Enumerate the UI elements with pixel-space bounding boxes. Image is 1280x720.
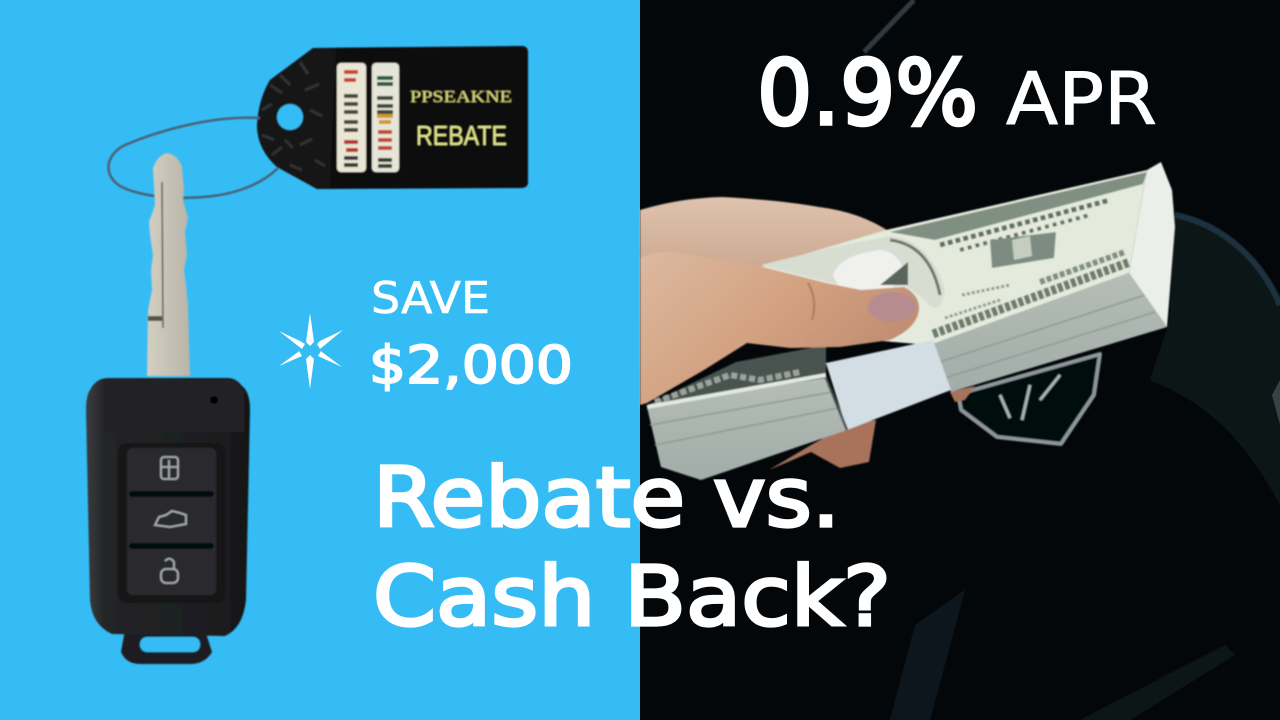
fob button icons — [155, 457, 186, 583]
panel: dark car interior right background — [640, 0, 1280, 720]
hand back — [640, 197, 890, 400]
label: amount: $2,000 — [369, 336, 573, 396]
top bill — [761, 170, 1147, 345]
paper band — [826, 340, 951, 430]
tag — [257, 46, 528, 189]
headline: rebate vs cash back: Rebate vs. — [373, 451, 840, 546]
key ring — [109, 118, 278, 198]
label: save: SAVE — [371, 273, 490, 324]
icon: sparkle star — [279, 313, 343, 389]
thumbnail nail — [868, 292, 916, 322]
headline: rebate vs cash back — [373, 451, 891, 645]
panel: blue left background — [0, 0, 640, 720]
photo: hand holding cash — [640, 162, 1175, 480]
tag text: top line: PPSEAKNE — [410, 87, 512, 106]
headline: rebate vs cash back: Cash Back? — [373, 550, 891, 645]
fob buttons — [127, 448, 216, 595]
end of stack — [1129, 162, 1175, 327]
bill stack right side — [930, 273, 1167, 392]
car logo emblem — [958, 354, 1100, 444]
key fob body — [86, 378, 250, 664]
headline: 0.9% APR: APR — [1006, 57, 1157, 141]
headline: 0.9% APR: 0.9% — [757, 41, 978, 146]
key blade — [147, 153, 190, 376]
photo: key with tag — [86, 46, 528, 664]
thumb — [640, 252, 919, 405]
tag text: rebate: REBATE — [416, 120, 507, 151]
bill stack left side — [647, 377, 847, 480]
headline: 0.9% APR — [757, 41, 1157, 146]
fingers under stack — [769, 420, 876, 470]
curled bill — [761, 236, 945, 308]
tag strips — [337, 63, 399, 172]
